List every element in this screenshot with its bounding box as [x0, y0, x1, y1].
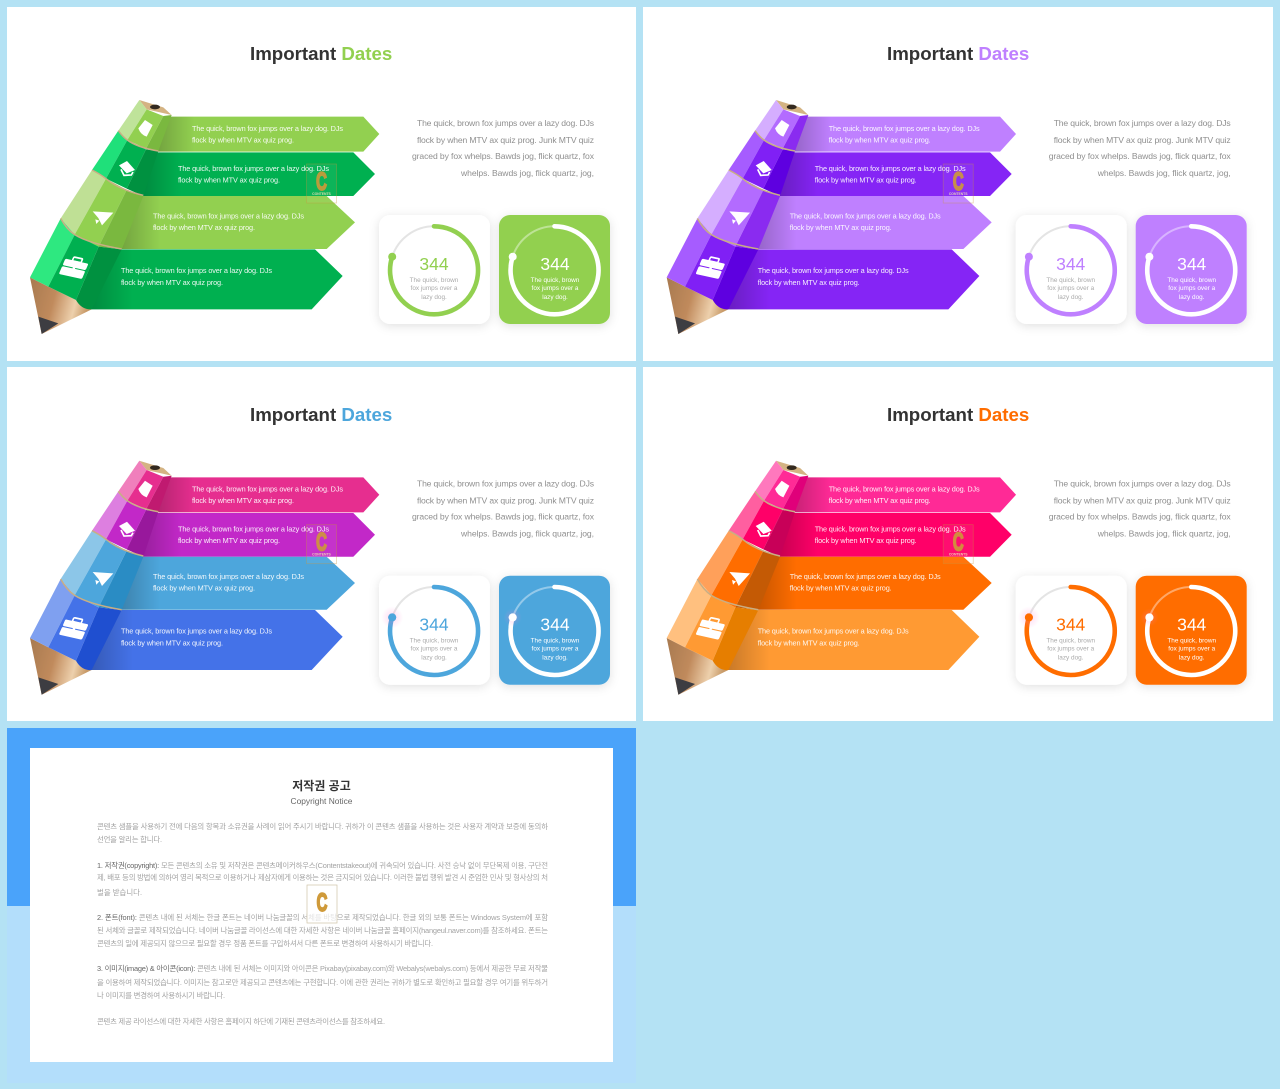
panel: blue version — [7, 367, 636, 721]
title: blue: Important Dates — [250, 404, 392, 425]
card text: coloured card: lazy dog. — [1179, 655, 1205, 662]
icon: book — [138, 481, 153, 497]
notice section 2: 2. 폰트(font): 콘텐츠 내에 된 서체는 한글 폰트는 네이버 나눔글꼴의 서체를 바탕으로 제작되었습니다. 한글 외의 보통 폰트는 Windows System에 포함 — [97, 913, 548, 922]
card text: coloured card — [531, 615, 580, 662]
copyright heading: 저작권 공고 — [292, 778, 351, 793]
card text: coloured card: lazy dog. — [1179, 294, 1205, 301]
card text: coloured card: 344 — [540, 254, 570, 274]
arrow text 3 — [790, 212, 941, 232]
arrow text 4 — [121, 266, 272, 287]
panel: copyright notice — [7, 728, 636, 1083]
card text: white card: 344 — [1056, 254, 1086, 274]
ring glow — [1018, 606, 1158, 628]
icon: book — [775, 120, 789, 137]
paragraph: The quick, brown fox jumps over a lazy dog. DJs — [1054, 479, 1231, 489]
arrow text 3: The quick, brown fox jumps over a lazy dog. DJs — [790, 572, 941, 581]
card text: white card: 344 — [419, 615, 449, 635]
watermark — [306, 164, 336, 203]
watermark: C — [317, 889, 327, 917]
arrow text 2: The quick, brown fox jumps over a lazy dog. DJs — [815, 525, 966, 534]
paragraph: flock by when MTV ax quiz prog. Junk MTV quiz — [1054, 496, 1231, 506]
copyright heading: Copyright Notice — [291, 796, 353, 806]
arrow text 1: The quick, brown fox jumps over a lazy dog. DJs — [192, 124, 343, 133]
arrow text 2: The quick, brown fox jumps over a lazy dog. DJs — [178, 525, 329, 534]
arrow text 2: flock by when MTV ax quiz prog. — [178, 176, 280, 184]
arrow text 3: The quick, brown fox jumps over a lazy dog. DJs — [153, 212, 304, 220]
watermark: C — [316, 529, 327, 557]
arrow text 1: The quick, brown fox jumps over a lazy dog. DJs — [829, 124, 980, 133]
pencil diagram: blue — [30, 461, 379, 695]
card text: coloured card: lazy dog. — [542, 294, 568, 301]
arrow text 4: flock by when MTV ax quiz prog. — [121, 639, 223, 648]
icon: graduation cap — [119, 161, 135, 175]
paragraph: The quick, brown fox jumps over a lazy dog. DJs — [417, 118, 594, 128]
card text: white card — [410, 254, 459, 301]
card text: white card: lazy dog. — [421, 655, 447, 662]
arrow text 2 — [815, 525, 966, 545]
card text: white card: lazy dog. — [1058, 655, 1084, 662]
arrow text 3: The quick, brown fox jumps over a lazy dog. DJs — [153, 572, 304, 581]
card text: white card: lazy dog. — [421, 294, 447, 301]
arrow text 4 — [758, 266, 909, 287]
arrow text 1: flock by when MTV ax quiz prog. — [192, 496, 294, 505]
watermark: CONTENTS — [312, 192, 332, 196]
arrow text 4: The quick, brown fox jumps over a lazy dog. DJs — [121, 266, 272, 275]
card text: coloured card: The quick, brown — [531, 277, 580, 284]
arrow text 1: flock by when MTV ax quiz prog. — [829, 136, 931, 144]
panel: orange version — [643, 367, 1273, 721]
notice section 2 — [97, 913, 548, 948]
card text: coloured card: The quick, brown — [1167, 277, 1216, 284]
arrow text 1 — [829, 485, 980, 505]
icon: graduation cap — [756, 161, 772, 175]
pencil diagram: green — [30, 100, 379, 334]
icon: briefcase — [696, 255, 727, 279]
paragraph: graced by fox whelps. Bawds jog, flick quartz, fox — [1049, 151, 1231, 161]
card text: coloured card: 344 — [1177, 254, 1207, 274]
notice intro — [97, 822, 548, 844]
notice section 3 — [97, 964, 548, 1000]
arrow text 4: flock by when MTV ax quiz prog. — [758, 278, 860, 287]
card text: coloured card: 344 — [540, 615, 570, 635]
arrow text 4: flock by when MTV ax quiz prog. — [758, 639, 860, 648]
paragraph: whelps. Bawds jog, flick quartz, jog, — [1097, 529, 1231, 539]
arrow text 3 — [790, 572, 941, 593]
card text: white card: The quick, brown — [410, 638, 459, 645]
card text: coloured card: 344 — [1177, 615, 1207, 635]
arrow text 2 — [815, 164, 966, 184]
card text: coloured card — [531, 254, 580, 301]
notice section 2: 된 서체와 글꼴로 제작되었습니다. 네이버 나눔글꼴 라이선스에 대한 자세한 사항은 네이버 나눔글꼴 홈페이지(hangeul.naver.com)를 참조하세요. 폰트는 — [97, 926, 548, 935]
arrow text 2 — [178, 525, 329, 545]
arrow text 2: The quick, brown fox jumps over a lazy dog. DJs — [178, 164, 329, 173]
icon: paper plane — [729, 211, 750, 225]
card text: white card: fox jumps over a — [1047, 646, 1095, 653]
watermark — [306, 525, 336, 564]
copyright heading — [291, 778, 353, 806]
arrow text 1: flock by when MTV ax quiz prog. — [829, 496, 931, 505]
notice section 1: 1. 저작권(copyright): 모든 콘텐츠의 소유 및 저작권은 콘텐츠메이커하우스(Contentstakeout)에 귀속되어 있습니다. 사전 승낙 없이 무단복제 이용, 구단전 — [97, 861, 548, 870]
paragraph: flock by when MTV ax quiz prog. Junk MTV quiz — [417, 135, 594, 145]
arrow text 2: flock by when MTV ax quiz prog. — [815, 176, 917, 184]
progress cards — [1016, 576, 1247, 685]
progress cards — [1016, 215, 1247, 324]
arrow text 1: flock by when MTV ax quiz prog. — [192, 136, 294, 144]
notice section 1: 제, 배포 등의 방법에 의하여 영리 목적으로 이용하거나 제삼자에게 이용하는 것은 금지되어 있습니다. 이러한 불법 행위 발견 시 준엄한 민사 및 형사상의 처 — [97, 873, 548, 882]
watermark — [943, 164, 973, 203]
paragraph: flock by when MTV ax quiz prog. Junk MTV quiz — [1054, 135, 1231, 145]
title: purple: Important Dates — [887, 43, 1029, 64]
card text: white card: The quick, brown — [1046, 277, 1095, 284]
card text: coloured card: The quick, brown — [531, 638, 580, 645]
paragraph: flock by when MTV ax quiz prog. Junk MTV quiz — [417, 496, 594, 506]
arrow text 2 — [178, 164, 329, 184]
icon: graduation cap — [119, 522, 135, 536]
arrow text 3: flock by when MTV ax quiz prog. — [790, 223, 892, 232]
card text: coloured card — [1167, 254, 1216, 301]
notice section 2: 콘텐츠의 일에 제공되지 않으므로 필요할 경우 정품 폰트를 구입하셔서 다른 폰트로 변경하여 사용하시기 바랍니다. — [97, 939, 433, 948]
paragraph: The quick, brown fox jumps over a lazy dog. DJs — [1054, 118, 1231, 128]
card text: white card: fox jumps over a — [1047, 285, 1095, 292]
watermark: C — [953, 168, 964, 196]
notice intro: 콘텐츠 샘플을 사용하기 전에 다음의 항목과 소유권을 사례이 읽어 주시기 바랍니다. 귀하가 이 콘텐츠 샘플을 사용하는 것은 사용자 계약과 보증에 동의하 — [97, 822, 548, 831]
paragraph: whelps. Bawds jog, flick quartz, jog, — [1097, 168, 1231, 178]
arrow text 4: The quick, brown fox jumps over a lazy dog. DJs — [121, 627, 272, 636]
icon: paper plane — [93, 211, 113, 225]
notice footer: 콘텐츠 제공 라이선스에 대한 자세한 사항은 홈페이지 하단에 기재된 콘텐츠라이선스를 참조하세요. — [97, 1017, 385, 1026]
card text: coloured card: The quick, brown — [1167, 638, 1216, 645]
arrow text 2: flock by when MTV ax quiz prog. — [178, 536, 280, 545]
watermark: CONTENTS — [312, 553, 332, 557]
arrow text 3: flock by when MTV ax quiz prog. — [790, 584, 892, 593]
paragraph — [412, 118, 595, 178]
card text: white card — [410, 615, 459, 662]
card text: white card: 344 — [1056, 615, 1086, 635]
notice section 3: 나 이미지를 변경하여 사용하시기 바랍니다. — [97, 991, 225, 1000]
title: green: Important Dates — [250, 43, 392, 64]
watermark — [307, 885, 337, 923]
arrow text 3: flock by when MTV ax quiz prog. — [153, 584, 255, 593]
icon: briefcase — [59, 616, 90, 640]
progress cards — [379, 215, 610, 324]
paragraph: whelps. Bawds jog, flick quartz, jog, — [460, 529, 594, 539]
card text: white card: 344 — [419, 254, 449, 274]
icon: graduation cap — [756, 522, 772, 536]
paragraph — [412, 479, 595, 539]
card text: coloured card: fox jumps over a — [532, 646, 579, 653]
panel: green version — [7, 7, 636, 361]
card text: coloured card — [1167, 615, 1216, 662]
arrow text 1 — [192, 485, 343, 505]
card text: coloured card: fox jumps over a — [532, 285, 579, 292]
card text: coloured card: fox jumps over a — [1168, 285, 1216, 292]
arrow text 3: The quick, brown fox jumps over a lazy dog. DJs — [790, 212, 941, 220]
panel: purple version — [643, 7, 1273, 361]
arrow text 1: The quick, brown fox jumps over a lazy dog. DJs — [829, 485, 980, 494]
notice intro: 선언을 알리는 합니다. — [97, 835, 162, 844]
watermark: C — [316, 168, 327, 196]
paragraph: whelps. Bawds jog, flick quartz, jog, — [460, 168, 594, 178]
notice section 1: 벌을 받습니다. — [97, 888, 142, 897]
arrow text 4: The quick, brown fox jumps over a lazy dog. DJs — [758, 266, 909, 275]
arrow text 3 — [153, 212, 304, 232]
pencil diagram: purple — [667, 100, 1016, 334]
icon: briefcase — [696, 616, 727, 640]
card text: white card — [1046, 254, 1095, 301]
arrow text 1: The quick, brown fox jumps over a lazy dog. DJs — [192, 485, 343, 494]
notice section 3: 3. 이미지(image) & 아이콘(icon): 콘텐츠 내에 된 서체는 이미지와 아이콘은 Pixabay(pixabay.com)와 Webalys(webalys.com) 등에서 제공한 무료 저작물 — [97, 964, 548, 973]
icon: book — [138, 120, 153, 137]
notice section 1 — [97, 861, 548, 897]
notice section 3: 을 이용하여 제작되었습니다. 이미지는 참고로만 제공되고 콘텐츠에는 구현합니다. 이에 관한 권리는 귀하가 별도로 확인하고 필요할 경우 여기를 위두하거 — [97, 978, 548, 987]
card text: white card: fox jumps over a — [411, 646, 458, 653]
arrow text 3 — [153, 572, 304, 593]
icon: briefcase — [59, 255, 90, 279]
card text: white card — [1046, 615, 1095, 662]
card text: coloured card: lazy dog. — [542, 655, 568, 662]
watermark: CONTENTS — [949, 192, 968, 196]
title: orange: Important Dates — [887, 404, 1029, 425]
paragraph — [1049, 118, 1231, 178]
paragraph: The quick, brown fox jumps over a lazy dog. DJs — [417, 479, 594, 489]
card text: white card: The quick, brown — [410, 277, 459, 284]
paragraph: graced by fox whelps. Bawds jog, flick quartz, fox — [412, 512, 595, 522]
arrow text 4: flock by when MTV ax quiz prog. — [121, 278, 223, 287]
arrow text 2: The quick, brown fox jumps over a lazy dog. DJs — [815, 164, 966, 173]
card text: white card: lazy dog. — [1058, 294, 1084, 301]
watermark: CONTENTS — [949, 553, 968, 557]
arrow text 3: flock by when MTV ax quiz prog. — [153, 223, 255, 232]
icon: book — [775, 481, 789, 497]
arrow text 1 — [192, 124, 343, 144]
icon: paper plane — [729, 572, 750, 586]
card text: white card: The quick, brown — [1046, 638, 1095, 645]
card text: white card: fox jumps over a — [411, 285, 458, 292]
arrow text 2: flock by when MTV ax quiz prog. — [815, 536, 917, 545]
arrow text 4 — [758, 627, 909, 648]
arrow text 4: The quick, brown fox jumps over a lazy dog. DJs — [758, 627, 909, 636]
paragraph: graced by fox whelps. Bawds jog, flick quartz, fox — [412, 151, 595, 161]
progress cards — [379, 576, 610, 685]
watermark — [943, 525, 973, 564]
arrow text 4 — [121, 627, 272, 648]
paragraph: graced by fox whelps. Bawds jog, flick quartz, fox — [1049, 512, 1231, 522]
arrow text 1 — [829, 124, 980, 144]
card text: coloured card: fox jumps over a — [1168, 646, 1216, 653]
icon: paper plane — [93, 572, 113, 586]
paragraph — [1049, 479, 1231, 539]
ring glow — [381, 606, 522, 628]
pencil diagram: orange — [667, 461, 1016, 695]
watermark: C — [953, 529, 964, 557]
